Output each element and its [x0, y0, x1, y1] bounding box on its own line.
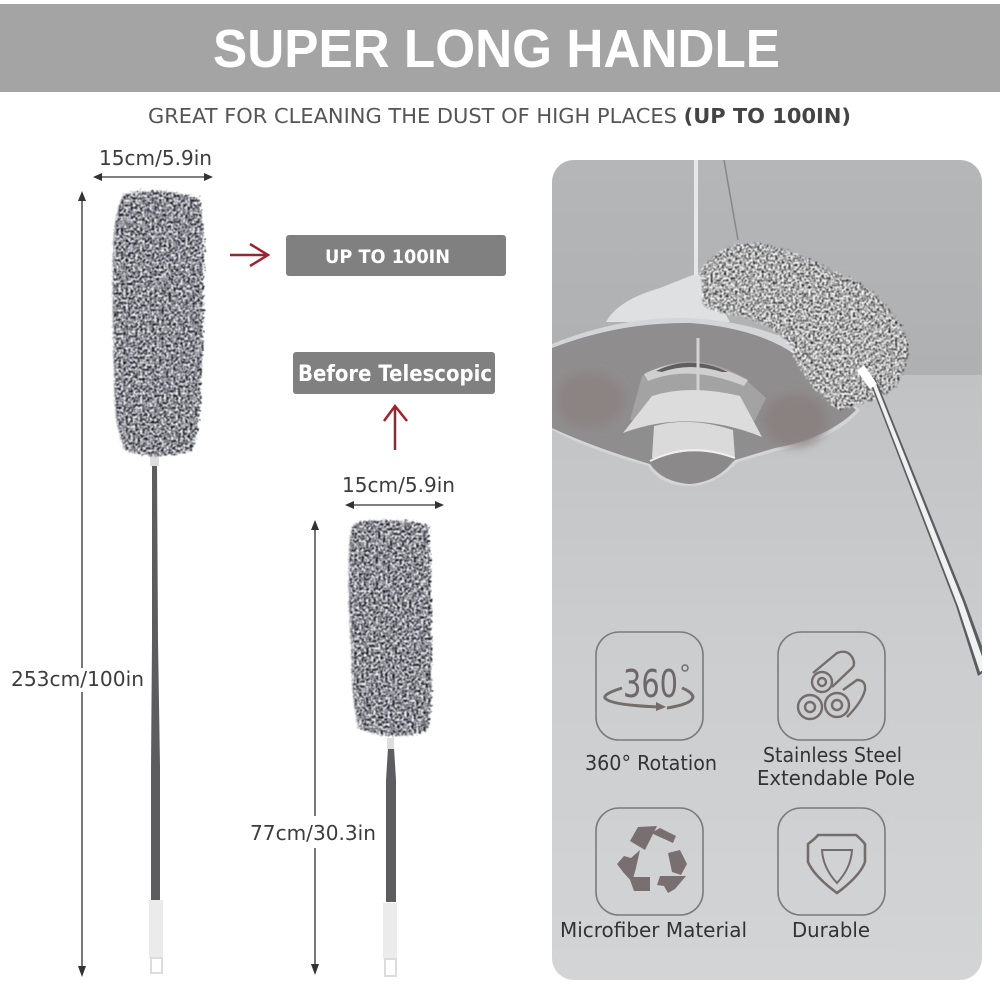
red arrow up	[384, 406, 407, 450]
icon: shield	[808, 835, 865, 893]
extended width dimension	[93, 146, 213, 181]
lamp	[552, 275, 860, 486]
collapsed height dimension	[250, 520, 376, 975]
icon: steel tubes	[798, 652, 865, 719]
hanging cords	[696, 160, 738, 280]
icon: recycle	[617, 826, 687, 893]
label second line: Extendable Pole	[757, 766, 915, 790]
red arrow right	[230, 244, 268, 266]
title banner	[0, 4, 1000, 92]
telescopic pole	[857, 365, 990, 676]
icon: 360 arrow	[605, 662, 693, 711]
feature: microfiber material	[560, 808, 747, 942]
extended width dimension: 15cm/5.9in	[99, 146, 212, 170]
collapsed width dimension: 15cm/5.9in	[342, 473, 455, 497]
ceiling background	[552, 160, 982, 376]
collapsed duster	[348, 520, 432, 976]
collapsed height dimension: 77cm/30.3in	[250, 821, 376, 845]
label: before telescopic: Before Telescopic	[298, 362, 492, 387]
label: Microfiber Material	[560, 918, 747, 942]
label: up to 100in: UP TO 100IN	[325, 246, 450, 268]
panel: lamp photo and features	[552, 160, 990, 980]
icon: 360 arrow: 360	[623, 662, 678, 706]
feature: 360 rotation	[585, 632, 717, 775]
subtitle: GREAT FOR CLEANING THE DUST OF HIGH PLACES (UP TO 100IN)	[148, 104, 851, 128]
icon box	[596, 632, 703, 740]
feature: stainless steel pole	[757, 632, 915, 790]
feature: durable	[778, 808, 885, 942]
extended height dimension	[11, 191, 144, 977]
label: up to 100in	[286, 235, 506, 276]
label: before telescopic	[293, 352, 495, 394]
label: Stainless Steel	[763, 743, 902, 767]
icon box	[778, 808, 885, 915]
extended duster	[112, 191, 204, 973]
wall background	[552, 375, 982, 980]
title banner: SUPER LONG HANDLE	[213, 19, 780, 79]
duster on lamp	[700, 243, 908, 410]
label: 360° Rotation	[585, 751, 717, 775]
icon box	[596, 808, 703, 915]
icon box	[778, 632, 885, 740]
collapsed width dimension	[342, 473, 455, 509]
label: Durable	[792, 918, 870, 942]
extended height dimension: 253cm/100in	[11, 667, 144, 691]
